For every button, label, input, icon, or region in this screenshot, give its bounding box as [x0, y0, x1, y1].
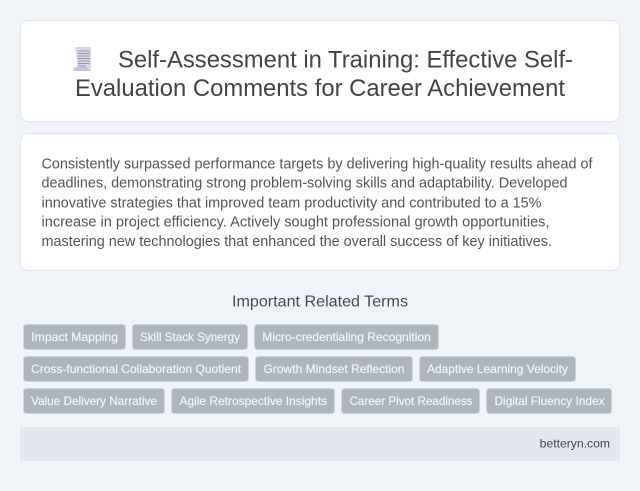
tag: Adaptive Learning Velocity: Adaptive Learning Velocity [427, 362, 568, 376]
tag: Digital Fluency Index: Digital Fluency Index [494, 394, 604, 408]
text block: self-evaluation comment: Consistently surpassed performance targets by delivering high-quality results ahead of [42, 156, 593, 172]
panel: title card [20, 20, 620, 122]
tags: related terms [24, 324, 612, 414]
tag: Skill Stack Synergy: Skill Stack Synergy [140, 330, 240, 344]
tag: Impact Mapping [24, 324, 126, 350]
tag: Career Pivot Readiness: Career Pivot Readiness [350, 394, 472, 408]
tag: Micro-credentialing Recognition [254, 324, 438, 350]
title: Evaluation Comments for Career Achievement [75, 75, 565, 102]
title [75, 46, 573, 102]
tag: Value Delivery Narrative [24, 388, 164, 414]
tag: Cross-functional Collaboration Quotient [24, 356, 248, 382]
tag: Impact Mapping: Impact Mapping [31, 330, 118, 344]
tag: Value Delivery Narrative: Value Delivery Narrative [31, 394, 157, 408]
tag: Skill Stack Synergy [132, 324, 248, 350]
tag: Career Pivot Readiness [342, 388, 480, 414]
tag: Adaptive Learning Velocity [420, 356, 576, 382]
text block: self-evaluation comment: mastering new technologies that enhanced the overall success of key initiatives. [42, 234, 552, 250]
tag: Agile Retrospective Insights [172, 388, 334, 414]
footer bar [20, 427, 620, 461]
tag: Micro-credentialing Recognition: Micro-credentialing Recognition [262, 330, 431, 344]
panel: self-evaluation text [20, 134, 620, 270]
footer: site name: betteryn.com [540, 437, 610, 451]
text block: self-evaluation comment [42, 156, 593, 250]
tag: Digital Fluency Index [486, 388, 612, 414]
icon: scroll document [73, 47, 91, 71]
tag: Growth Mindset Reflection [256, 356, 412, 382]
tag: Cross-functional Collaboration Quotient: Cross-functional Collaboration Quotient [31, 362, 242, 376]
tag: Agile Retrospective Insights: Agile Retrospective Insights [180, 394, 327, 408]
tag: Growth Mindset Reflection: Growth Mindset Reflection [264, 362, 404, 376]
title: Self-Assessment in Training: Effective Self- [118, 46, 573, 74]
text block: self-evaluation comment: innovative strategies that improved team productivity and contributed to a 15% [42, 195, 542, 211]
text block: self-evaluation comment: deadlines, demonstrating strong problem-solving skills and adaptability. Developed [42, 176, 568, 192]
heading: important related terms: Important Related Terms [232, 294, 408, 311]
text block: self-evaluation comment: increase in project efficiency. Actively sought professional growth opportunities, [42, 215, 550, 231]
